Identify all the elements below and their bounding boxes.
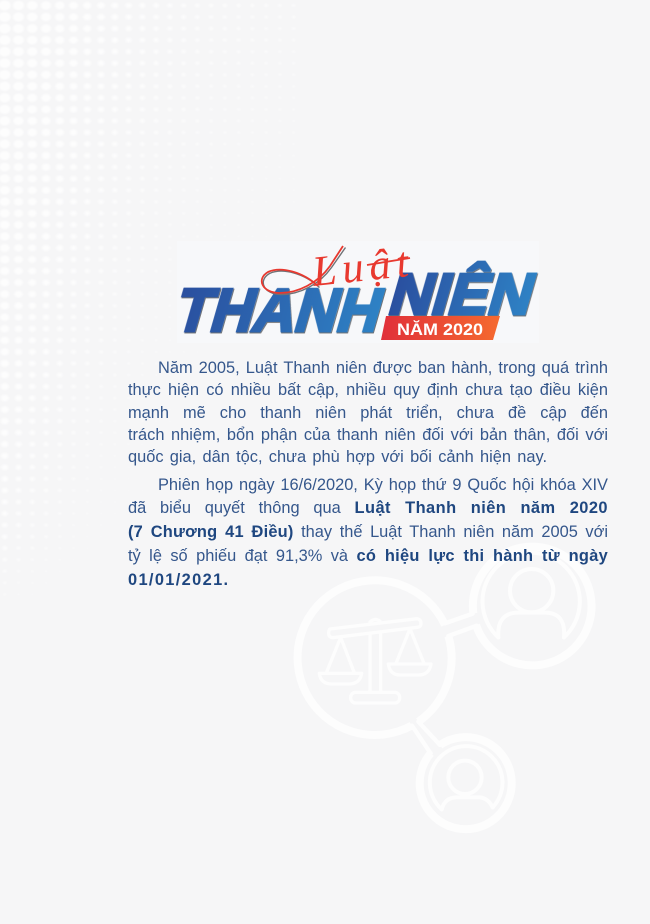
text block: paragraph 2 xyxy=(128,476,608,589)
connector: top right xyxy=(445,614,477,636)
icon: large circle with scales of justice xyxy=(298,580,452,735)
text block: paragraph 2: đã biểu quyết thông qua Luật Thanh niên năm 2020 xyxy=(128,499,608,517)
logo word: NIÊN: NIÊN xyxy=(382,261,543,327)
logo word: Luật with flourish: Luật xyxy=(309,239,412,296)
halftone dot background xyxy=(0,0,300,600)
logo word: THANH: THANH xyxy=(168,277,391,345)
text block: paragraph 1: thực hiện có nhiều bất cập, nhiều quy định chưa tạo điều kiện xyxy=(128,381,608,399)
text block: paragraph 2: tỷ lệ số phiếu đạt 91,3% và có hiệu lực thi hành từ ngày xyxy=(128,547,608,565)
text block: paragraph 2: 01/01/2021. xyxy=(128,571,229,589)
text block: paragraph 1: Năm 2005, Luật Thanh niên được ban hành, trong quá trình xyxy=(158,359,608,377)
logo badge: NĂM 2020 xyxy=(381,316,500,340)
text block: paragraph 1: quốc gia, dân tộc, chưa phù hợp với bối cảnh hiện nay. xyxy=(128,448,547,466)
connector: bottom xyxy=(412,722,440,753)
logo badge: NĂM 2020: NĂM 2020 xyxy=(397,320,483,339)
logo panel xyxy=(177,241,539,343)
text block: paragraph 1 xyxy=(128,359,608,466)
logo word: Luật with flourish xyxy=(262,239,412,296)
text block: paragraph 1: trách nhiệm, bổn phận của thanh niên đối với bản thân, đối với xyxy=(128,426,608,444)
icon: person in top right circle xyxy=(473,547,592,665)
icon: person in bottom circle xyxy=(420,737,512,829)
text block: paragraph 1: mạnh mẽ cho thanh niên phát triển, chưa đề cập đến xyxy=(128,404,608,422)
text block: paragraph 2: (7 Chương 41 Điều) thay thế Luật Thanh niên năm 2005 với xyxy=(128,523,608,541)
text block: paragraph 2: Phiên họp ngày 16/6/2020, Kỳ họp thứ 9 Quốc hội khóa XIV xyxy=(158,476,608,494)
